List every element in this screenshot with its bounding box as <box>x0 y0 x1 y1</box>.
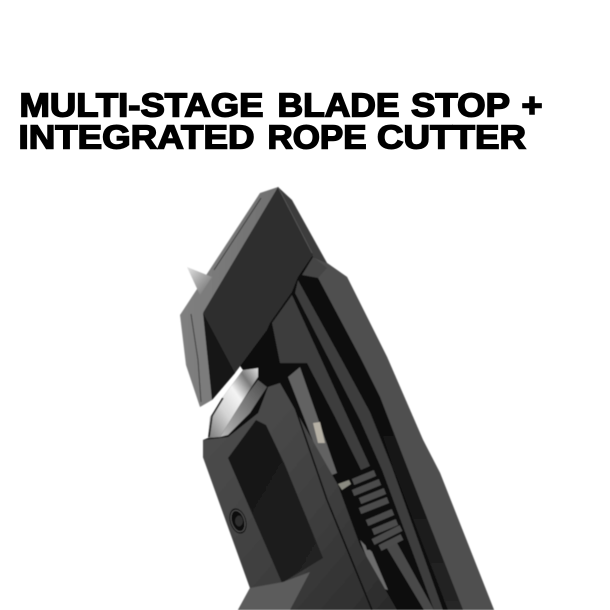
title: CUTTER <box>377 118 526 155</box>
top and left bevel <box>180 187 278 407</box>
title: BLADE <box>278 86 400 123</box>
inner grey strip and right rail <box>295 280 443 610</box>
utility knife product illustration <box>180 187 494 610</box>
recess end block <box>302 257 327 278</box>
front plate <box>272 295 370 470</box>
right bevel <box>278 187 327 263</box>
bevel highlight <box>278 187 312 253</box>
grip dark inlay <box>228 420 323 583</box>
title <box>18 86 542 155</box>
handle grip <box>203 383 397 610</box>
dark recess <box>300 278 463 610</box>
slider ribs <box>353 473 402 548</box>
thumb slider <box>338 470 402 550</box>
textured window lower <box>360 540 388 590</box>
hex screw <box>226 506 250 536</box>
head main face <box>203 187 313 400</box>
lower middle rail <box>385 541 434 610</box>
outer grey band <box>313 257 494 610</box>
body silhouette <box>203 187 494 610</box>
title: ROPE <box>268 118 366 155</box>
knife body <box>203 187 494 610</box>
lower dark facet <box>203 313 235 400</box>
blade tip <box>187 267 212 295</box>
seam lines <box>191 314 201 402</box>
title: INTEGRATED <box>18 118 255 155</box>
title: MULTI-STAGE <box>20 86 264 123</box>
textured window upper <box>288 367 337 477</box>
blade stop head <box>180 187 327 407</box>
title: STOP <box>411 86 510 123</box>
seam line <box>288 387 372 610</box>
bright blade carrier segment <box>313 422 325 443</box>
lower facet <box>238 572 310 610</box>
title: + <box>522 86 542 123</box>
exposed blade <box>208 333 280 438</box>
